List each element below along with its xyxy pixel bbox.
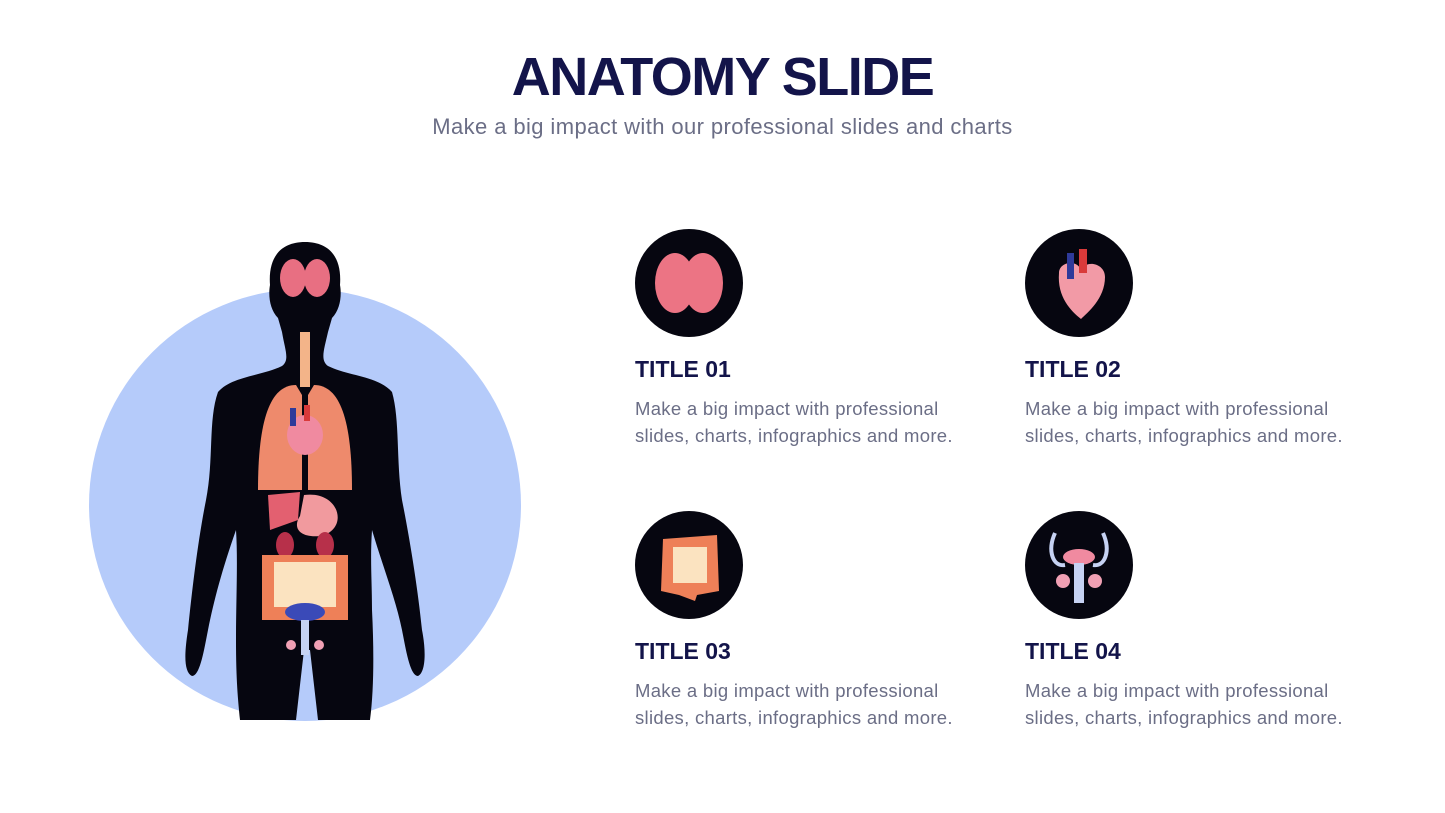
trachea [300,332,310,387]
text [1025,680,1343,728]
illustration: body anatomy [89,242,521,721]
text: slides, charts, infographics and more. [635,707,953,728]
item 02 [1025,229,1343,446]
item 03 [635,511,953,728]
text [1025,398,1343,446]
lungs [258,385,352,490]
heading: TITLE 01 [635,356,731,382]
icon: reproductive [1025,511,1133,619]
title: ANATOMY SLIDE [512,47,933,107]
text: Make a big impact with professional [1025,398,1329,419]
icon: heart [1025,229,1133,337]
heading: TITLE 02 [1025,356,1121,382]
text [635,680,953,728]
background circle [89,289,521,721]
intestines [262,555,348,620]
brain [280,259,330,297]
text: Make a big impact with professional [1025,680,1329,701]
subtitle: Make a big impact with our professional slides and charts [432,114,1013,139]
item 04 [1025,511,1343,728]
text [635,398,953,446]
text: slides, charts, infographics and more. [1025,707,1343,728]
text: Make a big impact with professional [635,680,939,701]
icon: intestines [635,511,743,619]
body silhouette [185,242,425,720]
heart [287,405,323,455]
text: slides, charts, infographics and more. [635,425,953,446]
kidneys [276,532,334,558]
text: Make a big impact with professional [635,398,939,419]
bladder and reproductive [285,603,325,655]
icon: brain [635,229,743,337]
liver and stomach [268,492,338,536]
text: slides, charts, infographics and more. [1025,425,1343,446]
heading: TITLE 03 [635,638,731,664]
heading: TITLE 04 [1025,638,1121,664]
item 01 [635,229,953,446]
